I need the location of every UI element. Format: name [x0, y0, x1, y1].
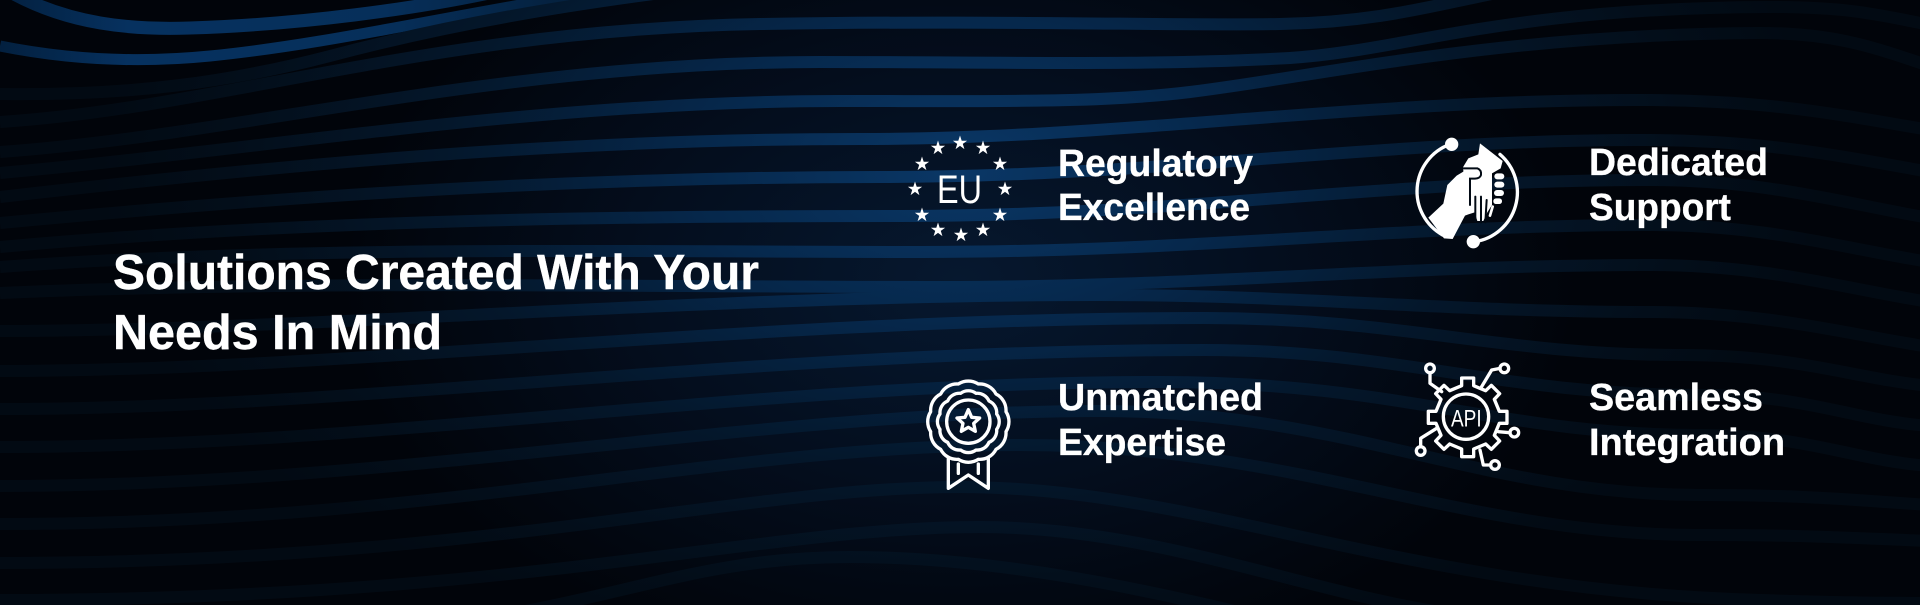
title — [113, 246, 759, 360]
icon: EU stars: EU — [937, 168, 982, 212]
label: unmatched expertise: Unmatched — [1058, 377, 1263, 419]
label: regulatory excellence: Excellence — [1058, 187, 1250, 229]
panel: regulatory excellence — [908, 136, 1253, 241]
label: regulatory excellence: Regulatory — [1058, 143, 1253, 185]
label: seamless integration: Integration — [1589, 422, 1785, 464]
label: dedicated support — [1589, 142, 1768, 229]
icon: helping hands in circle — [1417, 138, 1517, 248]
label: seamless integration: Seamless — [1589, 377, 1763, 419]
title: Needs In Mind — [113, 306, 442, 360]
label: dedicated support: Dedicated — [1589, 142, 1768, 184]
icon: API gear with circuit nodes: API — [1451, 405, 1482, 432]
label: unmatched expertise — [1058, 377, 1263, 464]
label: dedicated support: Support — [1589, 187, 1731, 229]
label: unmatched expertise: Expertise — [1058, 422, 1226, 464]
label: regulatory excellence — [1058, 143, 1253, 229]
icon: EU stars — [908, 136, 1012, 241]
title: Solutions Created With Your — [113, 246, 759, 300]
icon: API gear with circuit nodes — [1416, 364, 1519, 469]
panel: seamless integration — [1416, 364, 1785, 469]
panel: dedicated support — [1417, 138, 1768, 248]
panel: unmatched expertise — [928, 377, 1263, 488]
label: seamless integration — [1589, 377, 1785, 464]
icon: rosette award — [928, 381, 1009, 488]
